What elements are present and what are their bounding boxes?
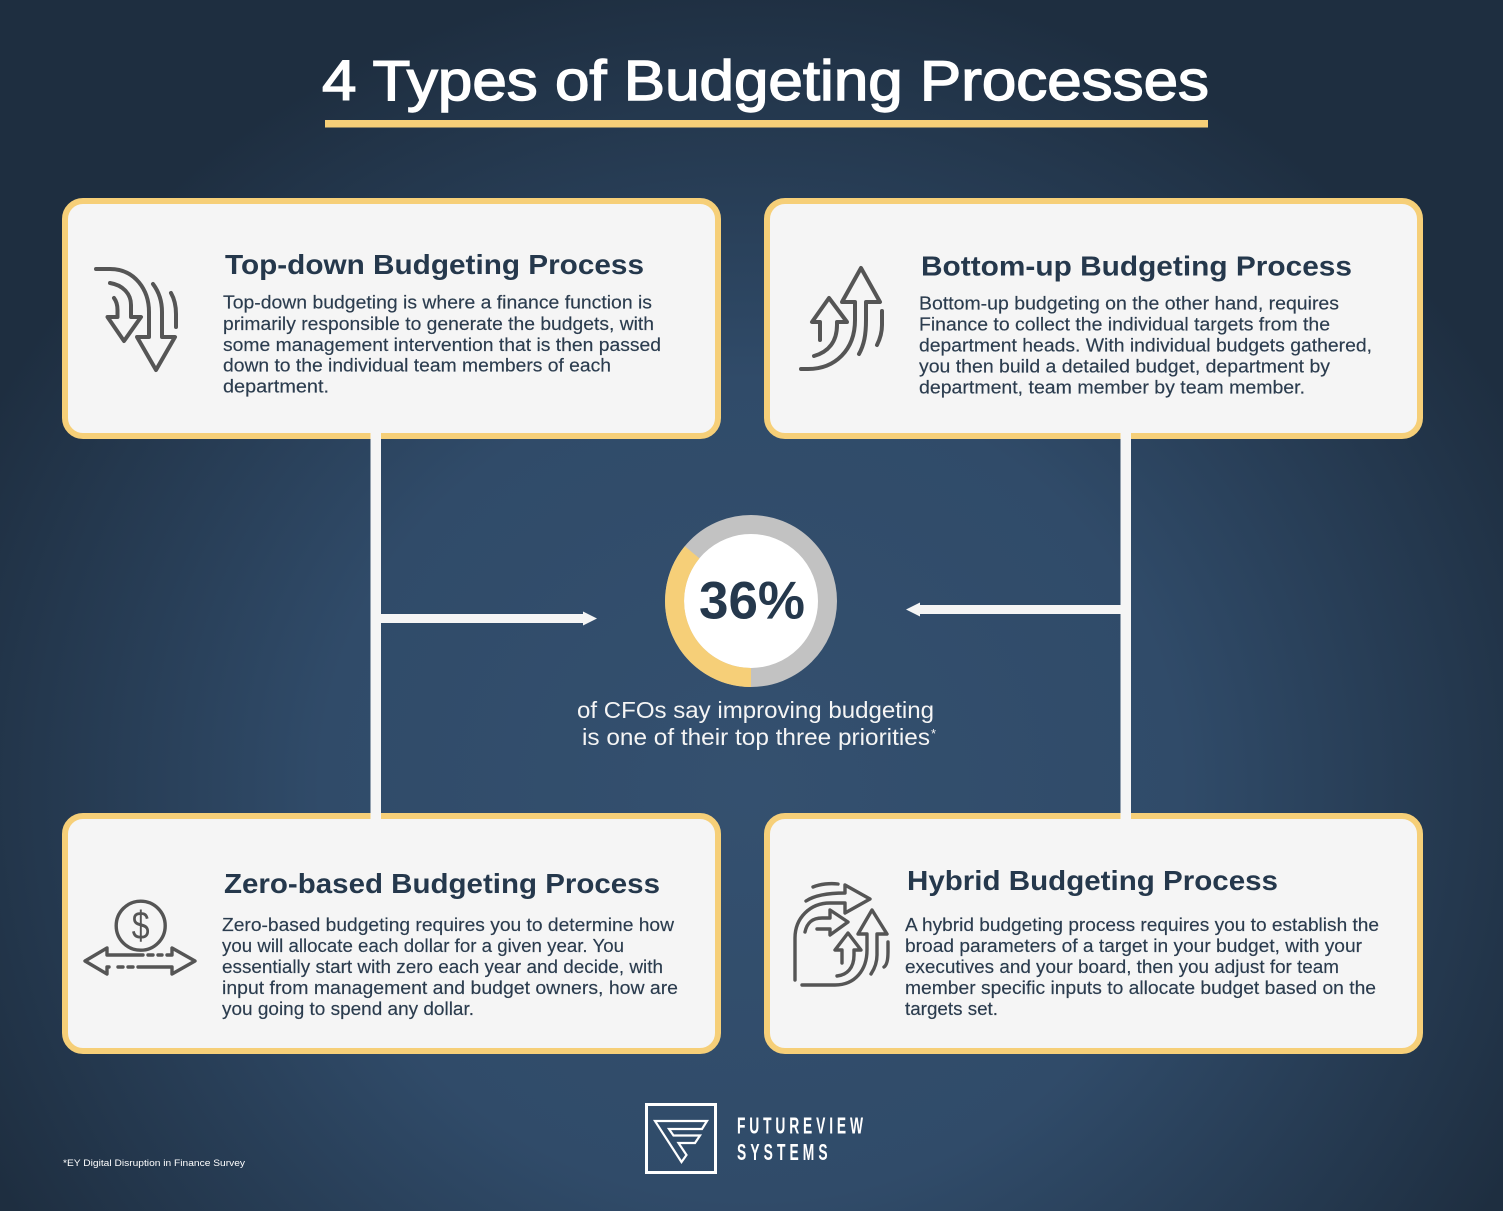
stat caption: * xyxy=(931,726,936,741)
heading: Top-down Budgeting Process xyxy=(225,249,644,280)
body text: essentially start with zero each year and decide, with xyxy=(222,957,663,977)
body text: department, team member by team member. xyxy=(919,378,1305,398)
heading: Bottom-up Budgeting Process xyxy=(921,250,1352,282)
body text: department. xyxy=(223,376,329,396)
body text: member specific inputs to allocate budget based on the xyxy=(905,978,1376,998)
body text: A hybrid budgeting process requires you to establish the xyxy=(905,915,1379,935)
logo wordmark: FUTUREVIEW xyxy=(737,1114,863,1140)
icon: dollar coin with arrows: $ xyxy=(132,903,150,948)
logo wordmark: SYSTEMS xyxy=(737,1141,828,1166)
body text: Bottom-up budgeting on the other hand, requires xyxy=(919,294,1339,314)
body text: targets set. xyxy=(905,999,998,1019)
donut chart: 36% xyxy=(674,524,828,678)
title: 4 Types of Budgeting Processes xyxy=(322,49,1209,113)
icon: up arrows xyxy=(801,268,882,369)
stat caption: of CFOs say improving budgeting xyxy=(577,697,934,723)
body text xyxy=(222,915,678,1019)
body text: down to the individual team members of each xyxy=(223,356,611,376)
body text: broad parameters of a target in your budget, with your xyxy=(905,936,1362,956)
body text: you will allocate each dollar for a given year. You xyxy=(222,936,624,956)
panel: top-down xyxy=(65,201,718,436)
icon: dollar coin with arrows xyxy=(85,901,195,974)
body text xyxy=(223,292,661,396)
body text: some management intervention that is then passed xyxy=(223,335,661,355)
body text: Top-down budgeting is where a finance function is xyxy=(223,292,652,312)
body text xyxy=(905,915,1379,1019)
heading: Zero-based Budgeting Process xyxy=(224,868,660,899)
stat caption: is one of their top three priorities xyxy=(582,724,930,750)
stat value: 36% xyxy=(699,572,805,630)
body text: Zero-based budgeting requires you to determine how xyxy=(222,915,675,935)
panel: bottom-up xyxy=(767,201,1420,436)
panel: hybrid xyxy=(767,816,1420,1051)
footnote: *EY Digital Disruption in Finance Survey xyxy=(63,1158,245,1169)
body text: Finance to collect the individual targets from the xyxy=(919,314,1330,334)
stat caption xyxy=(577,697,936,750)
connector: left with arrow xyxy=(370,433,597,820)
body text xyxy=(919,294,1372,398)
icon: down arrows xyxy=(96,269,176,370)
heading: Hybrid Budgeting Process xyxy=(907,865,1278,896)
panel: zero-based xyxy=(65,816,718,1051)
body text: primarily responsible to generate the budgets, with xyxy=(223,314,654,334)
logo xyxy=(646,1104,863,1172)
body text: input from management and budget owners, how are xyxy=(222,978,678,998)
connector: right with arrow xyxy=(906,433,1131,820)
logo wordmark xyxy=(737,1114,863,1166)
body text: you then build a detailed budget, department by xyxy=(919,356,1330,376)
body text: you going to spend any dollar. xyxy=(222,999,474,1019)
body text: department heads. With individual budgets gathered, xyxy=(919,336,1372,356)
icon: hybrid arrows xyxy=(795,884,888,985)
body text: executives and your board, then you adjust for team xyxy=(905,957,1339,977)
